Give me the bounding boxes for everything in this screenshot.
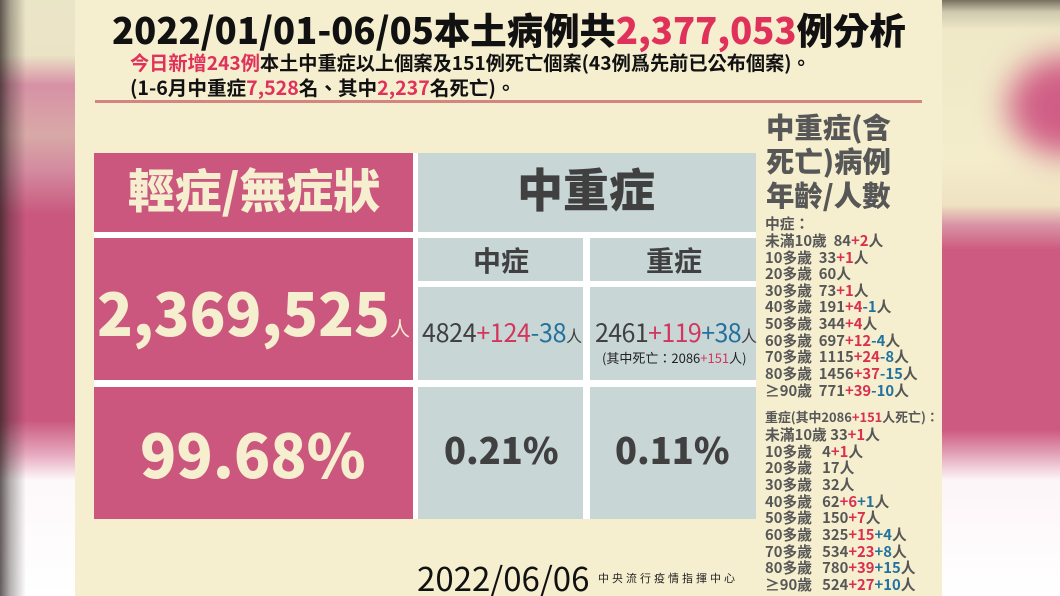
subtitle line 2: (1-6月中重症7,528名、其中2,237名死亡)。 — [130, 72, 516, 101]
header divider — [95, 100, 922, 103]
sidebar: severe cases by age — [765, 407, 939, 595]
text: 80多歲 780+39+15人 — [765, 557, 916, 578]
text: 10多歲 4+1人 — [765, 441, 863, 462]
text: ≥90歲 524+27+10人 — [765, 574, 916, 595]
panel: mild count — [94, 238, 413, 380]
text: 未滿10歲 84+2人 — [765, 230, 883, 251]
percent: moderate: 0.21% — [444, 423, 558, 475]
panel: severe header — [590, 238, 756, 281]
text: 60多歲 697+12-4人 — [765, 330, 900, 351]
text: 30多歲 32人 — [765, 474, 854, 495]
panel: mild percent — [94, 387, 413, 519]
heading: moderate and severe: 中重症 — [517, 155, 655, 221]
number: mild count: 2,369,525人 — [97, 268, 410, 353]
text: 50多歲 150+7人 — [765, 507, 881, 528]
text: 80多歲 1456+37-15人 — [765, 363, 918, 384]
source: command center: 中央流行疫情指揮中心 — [598, 570, 738, 586]
panel: moderate and severe header — [418, 153, 756, 232]
text: 40多歲 62+6+1人 — [765, 491, 889, 512]
sidebar: age heading — [766, 106, 891, 215]
text: 60多歲 325+15+4人 — [765, 524, 907, 545]
text: 70多歲 1115+24-8人 — [765, 346, 909, 367]
subtitle line 1: 今日新增243例本土中重症以上個案及151例死亡個案(43例爲先前已公布個案)。 — [130, 48, 811, 76]
text: 重症(其中2086+151人死亡)： — [765, 407, 939, 426]
table panel — [94, 153, 756, 519]
blurred background: left strip — [0, 0, 75, 596]
title: 2022/01/01-06/05本土病例共2,377,053例分析 — [112, 3, 906, 55]
number: moderate count: 4824+124-38人 — [422, 314, 582, 350]
text: 70多歲 534+23+8人 — [765, 541, 907, 562]
text: 20多歲 17人 — [765, 457, 854, 478]
text: 40多歲 191+4-1人 — [765, 296, 891, 317]
heading: severe: 重症 — [646, 240, 702, 280]
sidebar: age heading: 死亡)病例 — [766, 140, 891, 181]
text: 50多歲 344+4人 — [765, 313, 877, 334]
text: 10多歲 33+1人 — [765, 247, 869, 268]
panel: severe count — [590, 287, 756, 380]
panel: moderate count — [418, 287, 583, 380]
percent: severe: 0.11% — [615, 423, 730, 475]
panel: moderate percent — [418, 387, 583, 519]
panel: moderate header — [418, 238, 583, 281]
sidebar: moderate cases by age — [765, 213, 918, 401]
heading: mild or asymptomatic: 輕症/無症狀 — [128, 155, 380, 222]
text: 20多歲 60人 — [765, 263, 851, 284]
panel: mild header — [94, 153, 413, 232]
blurred background: right strip — [942, 0, 1060, 596]
panel: severe percent — [590, 387, 756, 519]
text: 中症： — [765, 213, 809, 234]
sidebar: age heading: 中重症(含 — [766, 106, 891, 147]
note: deaths among severe: (其中死亡：2086+151人) — [602, 348, 747, 367]
text: 30多歲 73+1人 — [765, 280, 869, 301]
number: severe count: 2461+119+38人 — [595, 314, 756, 350]
text: 未滿10歲 33+1人 — [765, 424, 880, 445]
heading: moderate: 中症 — [473, 240, 529, 280]
sidebar: age heading: 年齡/人數 — [766, 174, 890, 215]
percent: mild: 99.68% — [140, 410, 366, 496]
text: ≥90歲 771+39-10人 — [765, 380, 909, 401]
